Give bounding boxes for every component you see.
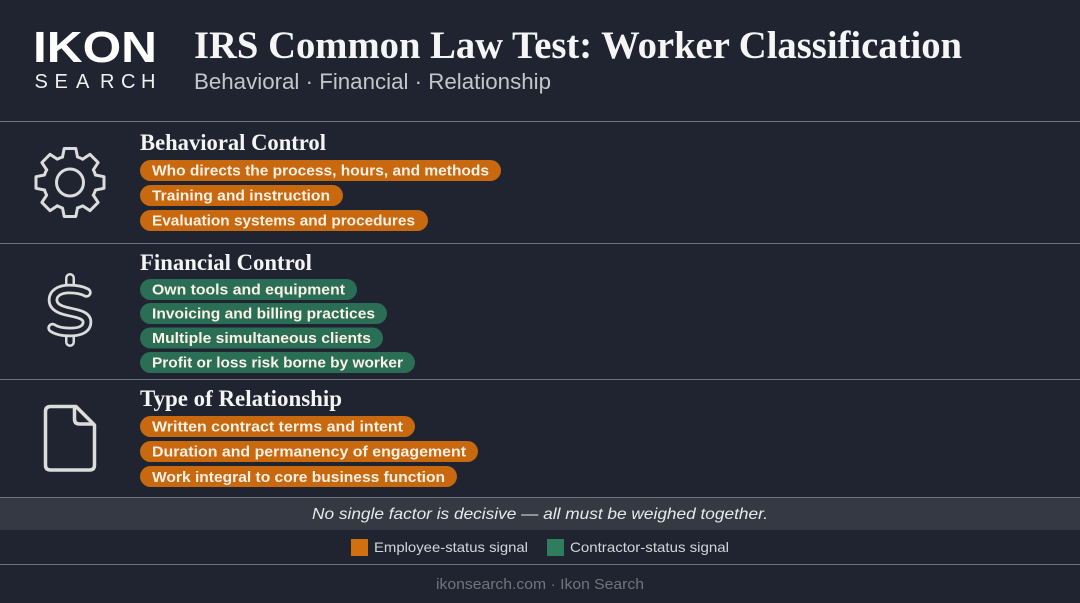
header	[33, 23, 962, 94]
panel: behavioral control	[36, 130, 501, 231]
pill: training: Training and instruction	[152, 188, 330, 204]
footer: ikonsearch.com · Ikon Search	[436, 576, 644, 593]
pill: clients: Multiple simultaneous clients	[152, 330, 371, 347]
legend	[351, 539, 729, 556]
legend: employee-status: Employee-status signal	[374, 539, 528, 555]
pill: duration: Duration and permanency of engagement	[152, 444, 466, 460]
legend: contractor-status: Contractor-status signal	[570, 539, 729, 555]
heading: type of relationship: Type of Relationship	[140, 386, 342, 412]
heading: behavioral control: Behavioral Control	[140, 130, 326, 156]
panel: financial control	[52, 250, 415, 373]
pill: tools	[140, 279, 357, 300]
pill: invoicing: Invoicing and billing practices	[152, 306, 375, 322]
pill: evaluation: Evaluation systems and procedures	[152, 212, 415, 230]
title: IRS Common Law Test: Worker Classification	[194, 24, 962, 67]
pill: process, hours, methods: Who directs the process, hours, and methods	[152, 162, 489, 180]
pill: contract	[140, 416, 415, 437]
subtitle: Behavioral · Financial · Relationship	[194, 69, 551, 94]
panel: type of relationship	[46, 386, 478, 487]
pill: tools: Own tools and equipment	[152, 282, 345, 298]
logo: Ikon Search	[33, 23, 157, 93]
pill: integral work: Work integral to core business function	[152, 469, 445, 486]
logo: Ikon Search: SEARCH	[34, 71, 155, 93]
pill: clients	[140, 328, 383, 348]
callout text: No single factor is decisive — all must be weighed together.	[312, 506, 768, 523]
pill: profit or loss: Profit or loss risk borne by worker	[152, 354, 403, 372]
icon: document	[46, 406, 94, 470]
icon: gear	[36, 148, 104, 216]
heading: financial control: Financial Control	[140, 250, 312, 276]
pill: training	[140, 185, 343, 206]
pill: contract: Written contract terms and intent	[152, 418, 403, 436]
icon: dollar sign	[52, 278, 87, 342]
logo: Ikon Search: IKON	[33, 23, 157, 72]
callout band	[0, 498, 1080, 530]
